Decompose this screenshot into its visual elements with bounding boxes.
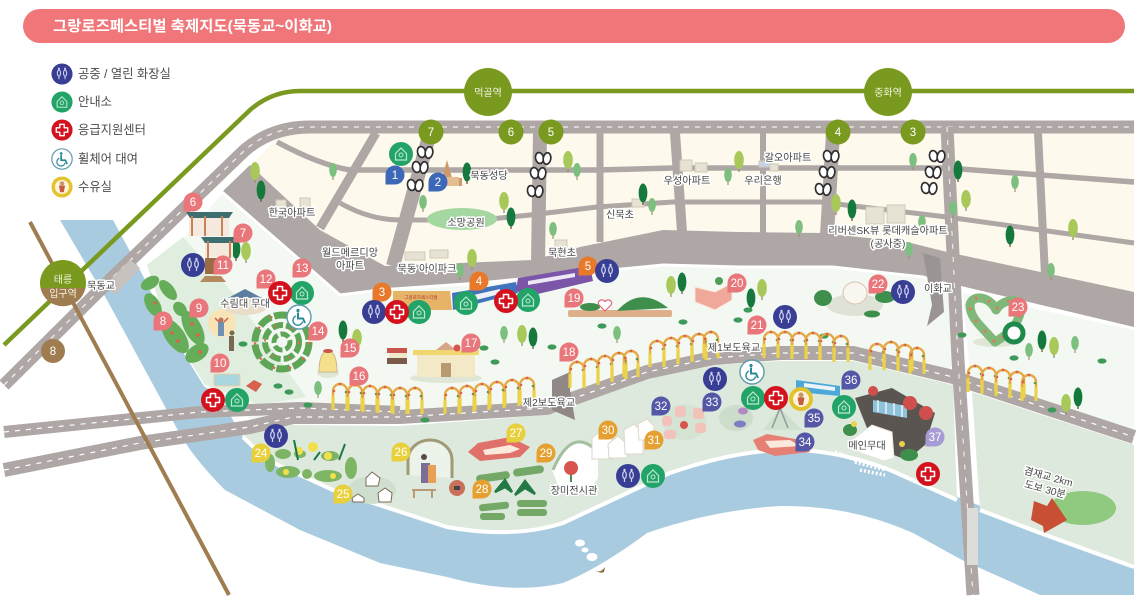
- vertical road: [947, 127, 973, 595]
- apartment sketches: [276, 160, 905, 260]
- place labels: 묵동 아이파크: [397, 263, 457, 275]
- pin 18: [560, 342, 578, 362]
- pin 12: 12: [260, 274, 272, 286]
- pin 31: [644, 430, 664, 450]
- place labels: 한국아파트: [269, 207, 315, 219]
- right upper park: [963, 293, 1134, 430]
- pin 16: 16: [353, 371, 365, 383]
- pin 2: 2: [435, 177, 441, 189]
- pin 34: [796, 432, 814, 452]
- pin 13: 13: [296, 263, 308, 275]
- pavilion 7: [201, 237, 237, 258]
- pin 27: 27: [510, 428, 522, 440]
- pin 3: [372, 282, 392, 302]
- rose beds 28: [476, 465, 547, 520]
- wheelchair markers: [287, 305, 764, 384]
- deer sculpture: [200, 258, 226, 282]
- exit numbers: [41, 120, 926, 363]
- pin 18: 18: [563, 347, 575, 359]
- mukdong bridge: [105, 260, 140, 295]
- trees: [232, 151, 1082, 415]
- pin 12: [256, 270, 276, 288]
- exit 5: [538, 120, 564, 144]
- pin 36: 36: [845, 375, 857, 387]
- pin 7: [234, 224, 252, 242]
- footprints: [406, 146, 946, 198]
- rose arches: [333, 331, 1036, 414]
- pin 23: 23: [1012, 302, 1024, 314]
- pin 32: 32: [655, 401, 667, 413]
- flower beds left: [138, 273, 212, 367]
- stepping stones and boat: [575, 540, 605, 573]
- numbered pins blue: [386, 166, 448, 192]
- pin 21: 21: [751, 320, 763, 332]
- pin 8: 8: [160, 316, 166, 328]
- pin 5: [578, 256, 598, 276]
- pin 22: 22: [872, 279, 884, 291]
- pin 20: [728, 274, 746, 292]
- 2nd footbridge stairs: [552, 372, 575, 420]
- legend item: information: 안내소: [78, 95, 112, 109]
- pin 4: [470, 272, 488, 290]
- pin 25: [334, 484, 352, 504]
- subway line green: [4, 91, 1134, 345]
- place labels: 장미전시관: [551, 485, 597, 497]
- garden 19: [568, 297, 672, 317]
- river: [60, 220, 1134, 595]
- pavilion 6: [186, 212, 233, 236]
- pin 19: [564, 288, 584, 308]
- shrubs: [238, 307, 1106, 423]
- rose exhibition hall 29: [552, 442, 598, 490]
- place labels: 신묵초: [606, 209, 634, 221]
- pink building 20: [695, 277, 732, 310]
- shore steps: [835, 452, 885, 475]
- pin 14: 14: [312, 326, 325, 338]
- church: [442, 160, 462, 186]
- pin 24: 24: [255, 448, 268, 460]
- legend item: wheelchair: 휠체어 대여: [78, 152, 138, 166]
- info booth purple: [516, 266, 593, 297]
- exit 6: [498, 120, 524, 144]
- right lower park: [972, 392, 1134, 567]
- place labels: 도보 30분: [1023, 478, 1067, 501]
- pin 11: 11: [217, 260, 229, 272]
- sowang park: [427, 208, 497, 230]
- pin 28: 28: [476, 484, 488, 496]
- pin 7: 7: [240, 228, 246, 240]
- pin 20: 20: [731, 278, 743, 290]
- exit 3: 3: [910, 127, 916, 139]
- pin 6: [184, 192, 202, 212]
- place labels: 우리은행: [744, 175, 782, 187]
- info booth orange: 그랑로즈페스티벌: [404, 294, 438, 301]
- wide riverside road: [222, 165, 1134, 327]
- pin 8: [154, 312, 172, 330]
- pin 1: 1: [392, 170, 398, 182]
- exit 3: [900, 120, 926, 144]
- exit 7: 7: [428, 127, 434, 139]
- white tents 30 31: [592, 419, 654, 459]
- pin 31: 31: [648, 435, 660, 447]
- green field: [1050, 491, 1116, 525]
- pin 29: 29: [540, 448, 552, 460]
- place labels: 우성아파트: [664, 175, 710, 187]
- place labels: 묵현초: [548, 247, 576, 259]
- legend item: nursing room: 수유실: [78, 180, 112, 194]
- pin 10: 10: [214, 358, 226, 370]
- pin 9: 9: [196, 303, 202, 315]
- station: 중화역: 중화역: [874, 87, 902, 99]
- pin 30: [598, 420, 618, 440]
- station: 태릉입구역: 태릉: [54, 274, 72, 286]
- main stage: [843, 386, 935, 461]
- restroom markers: [181, 253, 915, 488]
- spiral rose garden: [255, 315, 309, 369]
- pin 3: 3: [379, 287, 385, 299]
- numbered pins yellow: [252, 424, 526, 504]
- exit 4: [826, 120, 850, 144]
- top road: [4, 127, 1134, 385]
- place labels: 소망공원: [447, 217, 485, 229]
- pin 27: [506, 424, 526, 442]
- numbered pins pink: [154, 192, 1028, 386]
- place labels: 이화교: [924, 283, 952, 295]
- book stack: [387, 348, 407, 364]
- yellow flower beds 24: [265, 440, 357, 482]
- heart garden 23: [970, 298, 1023, 347]
- pin 23: [1008, 298, 1028, 316]
- numbered pins purple: [652, 370, 944, 452]
- rest booth 10: [214, 374, 262, 392]
- fountain 22: [814, 282, 895, 318]
- street grid: [277, 133, 1134, 275]
- pin 32: [652, 396, 670, 416]
- emergency markers: [201, 281, 940, 486]
- station: 태릉입구역: 입구역: [49, 287, 77, 300]
- legend item: emergency: 응급지원센터: [78, 123, 146, 137]
- dome lantern 15: [317, 349, 339, 378]
- lower roads and walkway: [4, 353, 1134, 470]
- cone structure 35: [763, 408, 802, 430]
- blue sign 36: [796, 380, 840, 396]
- place labels: 메인무대: [848, 440, 886, 452]
- station: 중화역: [864, 68, 912, 116]
- numbered pins orange: [372, 256, 598, 302]
- pin 26: 26: [395, 447, 407, 459]
- place labels: 수림대 무대: [220, 298, 270, 310]
- pin 30: 30: [602, 425, 614, 437]
- place labels: 묵동성당: [470, 170, 508, 182]
- title banner: [23, 9, 1125, 43]
- pin 13: [292, 258, 312, 278]
- direction arrow: [1031, 498, 1067, 533]
- pin 9: [190, 298, 208, 318]
- building 17: [410, 342, 482, 383]
- nursing room marker: [789, 387, 813, 411]
- red sign 34: [753, 434, 810, 456]
- pin 35: 35: [808, 413, 820, 425]
- place labels: [87, 151, 1074, 502]
- arch with couple 26: [408, 440, 465, 498]
- pin 37: 37: [929, 432, 941, 444]
- pin 22: [868, 274, 888, 294]
- pin 36: [842, 370, 860, 390]
- pin 15: 15: [344, 343, 356, 355]
- pin 10: [210, 354, 230, 372]
- pin 25: 25: [337, 489, 349, 501]
- pin 14: [308, 322, 328, 340]
- photo zone figures: [208, 309, 236, 351]
- exit 8: 8: [50, 346, 56, 358]
- legend: [51, 63, 171, 198]
- pin 19: 19: [568, 293, 580, 305]
- pin 17: 17: [465, 338, 477, 350]
- pin 21: [748, 316, 766, 334]
- place labels: 월드메르디앙: [322, 247, 379, 259]
- tents 25: [348, 472, 396, 504]
- upper park area: [147, 192, 953, 420]
- pin 15: [340, 338, 360, 358]
- subway line brown: [30, 222, 229, 595]
- pin 35: [804, 408, 824, 428]
- place labels: 겸재교 2km: [1022, 465, 1074, 489]
- info booth orange: [393, 291, 452, 310]
- information markers: [225, 142, 856, 488]
- legend item: restroom: 공중 / 열린 화장실: [78, 67, 171, 81]
- pin 28: [472, 480, 492, 498]
- mini garden 33: [719, 405, 753, 431]
- pin 33: [702, 392, 722, 412]
- station: 먹골역: 먹골역: [474, 87, 502, 99]
- place labels: 제2보도육교: [523, 397, 575, 409]
- ihwa bridge stairs: [923, 253, 944, 326]
- pin 17: [462, 334, 480, 352]
- exit 6: 6: [508, 127, 514, 139]
- pin 37: [926, 428, 944, 446]
- place labels: (공사중): [871, 238, 905, 250]
- residential blocks: [250, 133, 1134, 292]
- info booth blue: [452, 282, 518, 310]
- place labels: 아파트: [336, 260, 364, 272]
- place labels: 갈오아파트: [765, 151, 811, 164]
- exit 5: 5: [548, 127, 554, 139]
- pin 5: 5: [585, 261, 591, 273]
- exit 4: 4: [835, 127, 842, 139]
- pin 4: 4: [476, 276, 483, 288]
- pin 6: 6: [190, 197, 196, 209]
- pink tents 32: [662, 404, 707, 440]
- station: 태릉입구역: [40, 260, 86, 306]
- numbered pins amber: [472, 420, 664, 498]
- river bridge: [967, 508, 978, 565]
- station: 먹골역: [464, 68, 512, 116]
- exit 8: [41, 339, 65, 363]
- pin 24: [252, 444, 270, 462]
- title banner: 그랑로즈페스티벌 축제지도(묵동교~이화교): [53, 18, 332, 35]
- lower park area: [243, 361, 957, 532]
- exit 7: [418, 120, 444, 144]
- stage label plate: [223, 289, 267, 315]
- pin 34: 34: [799, 437, 812, 449]
- place labels: 리버센SK뷰 롯데캐슬아파트: [828, 225, 948, 237]
- pin 29: [536, 444, 556, 462]
- red sign 27: [468, 437, 530, 461]
- left garden zone: [147, 237, 306, 405]
- place labels: 묵동교: [87, 280, 115, 292]
- pin 11: [214, 256, 232, 274]
- pin 16: [350, 366, 368, 386]
- place labels: 제1보도육교: [708, 342, 760, 354]
- pin 26: [392, 442, 410, 462]
- pin 33: 33: [706, 397, 718, 409]
